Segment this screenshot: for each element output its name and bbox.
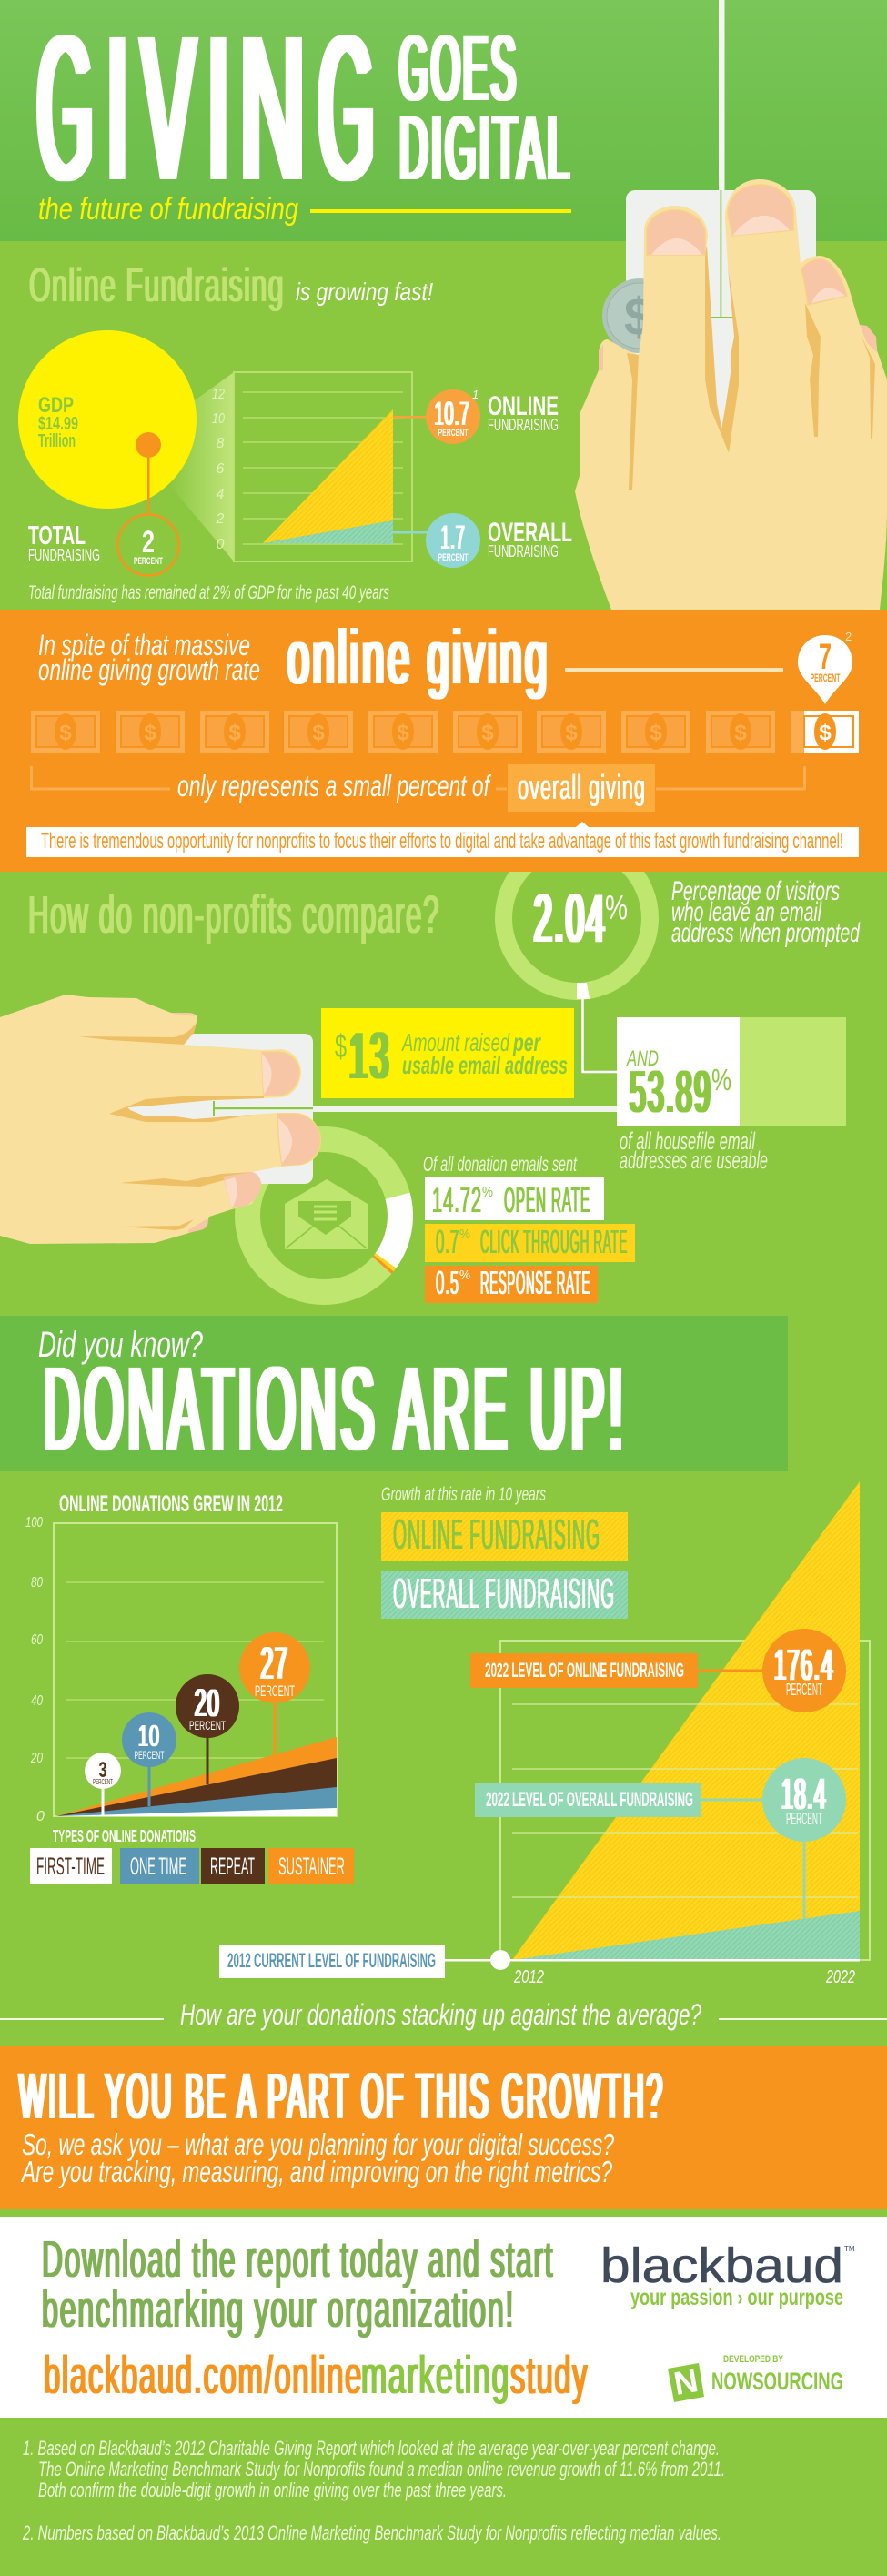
logo: blackbaud: blackbaud (600, 2238, 843, 2293)
GDP circle (18, 330, 197, 509)
callout: overall 1.7 percent: 1.7 (440, 519, 466, 556)
total fundraising callout (28, 432, 178, 575)
connector line (565, 668, 783, 672)
callout: 2022 overall level: 2022 LEVEL OF OVERALL FUNDRAISING (486, 1788, 693, 1811)
text: of all donation emails: Of all donation emails sent (423, 1152, 578, 1176)
callout: overall 1.7 percent: FUNDRAISING (488, 542, 559, 561)
bar stat: 53.89 percent: 53.89 (630, 1058, 712, 1125)
bills row (31, 711, 859, 753)
title: I (208, 0, 228, 224)
logo: blackbaud: TM (844, 2245, 855, 2253)
callout: 2022 online level: 2022 LEVEL OF ONLINE FUNDRAISING (485, 1659, 684, 1682)
line chart: fundraising growth (212, 372, 412, 561)
total fundraising callout: FUNDRAISING (28, 546, 100, 564)
questions: Are you tracking, measuring, and improving on the right metrics? (21, 2155, 612, 2188)
footnotes: Both confirm the double-digit growth in online giving over the past three years. (38, 2479, 507, 2501)
callout: 2022 online level: PERCENT (786, 1681, 822, 1699)
lead text: online giving growth rate (38, 653, 260, 686)
stat: open rate: 14.72 (432, 1181, 482, 1220)
legend: types of online donations (30, 1827, 354, 1884)
callout: $13 per email: usable email address (402, 1051, 568, 1079)
panel: orange online giving (0, 610, 887, 872)
title: G (318, 0, 374, 224)
heading: online fundraising: Online Fundraising (29, 259, 285, 312)
lead text (38, 629, 260, 686)
icon: envelope (285, 1179, 368, 1249)
pin: 27 percent (239, 1632, 310, 1756)
area chart: online donations: 40 (31, 1693, 43, 1709)
ring stat: 2.04 percent (504, 844, 650, 999)
stat: open rate (425, 1177, 604, 1220)
callout: online 10.7 percent: ONLINE (488, 391, 559, 421)
logo: nowsourcing: N (671, 2361, 701, 2402)
url: study (510, 2346, 589, 2405)
pin: 3 percent (85, 1753, 121, 1816)
heading: online giving: online giving (287, 614, 550, 700)
line chart: fundraising growth: 6 (217, 461, 225, 477)
callout: 2022 overall level: 18.4 (781, 1771, 827, 1819)
panel: download report (0, 2217, 887, 2418)
GDP circle: $14.99 (38, 414, 78, 434)
bar stat: 53.89 percent (617, 1017, 846, 1126)
pin: 7 percent: 7 (819, 637, 832, 677)
pin: 20 percent (176, 1674, 239, 1784)
url: blackbaud.com/online (44, 2346, 363, 2405)
stat: click through rate (425, 1223, 635, 1262)
line chart: fundraising growth: 12 (212, 387, 225, 402)
mouse cable (719, 0, 724, 191)
callout: $13 per email: per (512, 1028, 541, 1056)
icon: hand on mouse (575, 179, 887, 610)
pin: 27 percent: PERCENT (255, 1682, 295, 1700)
text: OPEN RATE (504, 1181, 590, 1220)
text: DIGITAL (399, 97, 572, 199)
title (37, 0, 572, 224)
logo: nowsourcing: DEVELOPED BY (723, 2354, 784, 2365)
line chart: fundraising growth: 10 (212, 411, 225, 427)
ring chart: email rates (247, 1139, 400, 1292)
callout: 2022 overall level (475, 1758, 846, 1919)
title: G (37, 0, 93, 224)
legend: overall fundraising (381, 1570, 628, 1619)
pin: 10 percent: 10 (138, 1719, 160, 1753)
callout: $13 per email: Amount raised (401, 1028, 510, 1056)
bills row: $ (144, 721, 156, 745)
box: overall giving (508, 764, 655, 812)
total fundraising callout: PERCENT (134, 556, 163, 567)
pin: 20 percent: PERCENT (189, 1718, 226, 1732)
bills row: $ (481, 721, 494, 745)
pin: 3 percent: PERCENT (93, 1778, 113, 1786)
ring stat: 2.04 percent: % (605, 889, 628, 927)
callout: overall 1.7 percent: PERCENT (438, 552, 469, 563)
lead text: In spite of that massive (38, 629, 250, 662)
callout: overall 1.7 percent (393, 513, 572, 568)
box: overall giving: overall giving (518, 769, 646, 807)
chart title: ONLINE DONATIONS GREW IN 2012 (59, 1491, 283, 1517)
bar stat: 53.89 percent: AND (626, 1046, 659, 1071)
title: V (142, 0, 195, 224)
callout: $13 per email: $ (335, 1027, 347, 1065)
pin: 3 percent: 3 (98, 1758, 107, 1783)
chart: ten year projection (445, 1481, 870, 1987)
subtitle rule (310, 209, 571, 213)
text: ONLINE FUNDRAISING (393, 1510, 600, 1558)
stat: click through rate: 0.7 (436, 1223, 459, 1260)
text: small percent: only represents a small percent of (177, 769, 492, 803)
footnote: total fundraising: Total fundraising has remained at 2% of GDP for the past 40 years (28, 582, 389, 603)
panel: donations are up band (0, 1316, 788, 1475)
pin: 7 percent: PERCENT (810, 672, 841, 684)
total fundraising callout: 2 (142, 525, 155, 560)
legend: types of online donations: ONE TIME (130, 1853, 186, 1880)
line chart: fundraising growth: 2 (216, 511, 225, 527)
bar stat: 53.89 percent: % (711, 1063, 731, 1096)
bills row: $ (565, 721, 578, 745)
callout: online 10.7 percent: FUNDRAISING (488, 416, 559, 434)
cta text: benchmarking your organization! (42, 2280, 515, 2339)
title: I (107, 0, 127, 224)
callout: 2012 current level (219, 1945, 510, 1978)
pin: 7 percent: 2 (845, 630, 852, 643)
text: did you know: Did you know? (38, 1325, 204, 1365)
stat: response rate (425, 1264, 598, 1303)
area chart: online donations: 0 (36, 1809, 45, 1824)
chart: ten year projection: 2012 (513, 1967, 544, 1987)
bills row: $ (397, 721, 409, 745)
callout: online 10.7 percent (393, 388, 559, 444)
area chart: online donations: 60 (31, 1632, 43, 1648)
logo: nowsourcing (668, 2354, 843, 2402)
legend: online fundraising (381, 1510, 628, 1561)
text: percentage of visitors (671, 876, 861, 948)
questions (21, 2127, 614, 2188)
heading: how do non-profits compare: How do non-profits compare? (28, 885, 440, 945)
pin: 20 percent: 20 (195, 1682, 220, 1725)
pin: 10 percent: PERCENT (135, 1749, 165, 1762)
connector (582, 999, 617, 1072)
bills row: $ (734, 721, 747, 745)
legend: types of online donations: SUSTAINER (278, 1853, 345, 1880)
icon: side hand (0, 995, 321, 1244)
GDP circle: Trillion (38, 431, 76, 451)
legend: types of online donations: TYPES OF ONLINE DONATIONS (53, 1827, 196, 1845)
url: marketing (361, 2346, 510, 2405)
ring stat: 2.04 percent: 2.04 (534, 880, 607, 956)
icon: coin: $ (624, 288, 653, 347)
callout: $13 per email: 13 (349, 1020, 391, 1093)
icon: mouse side (109, 1034, 313, 1184)
banner: opportunity (26, 822, 859, 857)
bills row: $ (312, 721, 325, 745)
area chart: online donations: 80 (31, 1575, 43, 1591)
line chart: fundraising growth: 0 (217, 537, 225, 552)
GDP circle: GDP (38, 393, 74, 418)
bills row: $ (59, 721, 72, 745)
pin: 10 percent (122, 1712, 176, 1806)
text: housefile: addresses are useable (620, 1147, 768, 1174)
zoom beam (170, 372, 234, 561)
area chart: online donations: 100 (25, 1515, 43, 1530)
icon: mouse top (626, 190, 816, 440)
text: housefile: of all housefile email (620, 1127, 756, 1155)
callout: 2022 overall level: PERCENT (786, 1810, 822, 1828)
legend: types of online donations: REPEAT (210, 1853, 255, 1880)
area chart: online donations: 20 (30, 1751, 43, 1766)
title: N (240, 0, 305, 224)
heading tail: is growing fast! (296, 278, 433, 306)
callout: overall 1.7 percent: OVERALL (488, 518, 572, 548)
stat: response rate: % (459, 1268, 470, 1283)
mouse cable horizontal (313, 1106, 617, 1112)
bills row: $ (819, 721, 832, 745)
text: housefile (620, 1127, 768, 1174)
callout: online 10.7 percent: 10.7 (435, 395, 469, 432)
callout: online 10.7 percent: PERCENT (438, 428, 469, 439)
area chart: online donations (25, 1515, 337, 1824)
callout: online 10.7 percent: 1 (472, 388, 479, 401)
stat: response rate: 0.5 (436, 1264, 459, 1301)
header band (0, 0, 887, 241)
callout: 2012 current level: 2012 CURRENT LEVEL OF FUNDRAISING (227, 1949, 436, 1972)
pin: 27 percent: 27 (260, 1638, 289, 1689)
text: growth at this rate: Growth at this rate in 10 years (381, 1484, 546, 1505)
text: CLICK THROUGH RATE (480, 1223, 628, 1260)
chart: ten year projection: 2022 (825, 1967, 855, 1987)
cta text (42, 2230, 554, 2339)
stat: open rate: % (482, 1185, 493, 1200)
line chart: fundraising growth: 4 (217, 487, 225, 502)
icon: coin (602, 278, 677, 353)
text: RESPONSE RATE (480, 1264, 590, 1301)
legend: types of online donations: FIRST-TIME (36, 1853, 105, 1880)
footnotes (22, 2437, 725, 2544)
stat: click through rate: % (459, 1227, 470, 1242)
line chart: fundraising growth: 8 (217, 436, 225, 451)
panel: will you be a part (0, 2046, 887, 2209)
bracket (31, 766, 804, 789)
title: GOES (399, 16, 519, 120)
bills row: $ (650, 721, 662, 745)
callout: 2022 online level (470, 1629, 846, 1712)
logo: blackbaud (600, 2238, 855, 2310)
questions: So, we ask you – what are you planning for your digital success? (22, 2127, 614, 2161)
subtitle: the future of fundraising (38, 192, 298, 227)
pin: 7 percent (798, 630, 852, 704)
callout: $13 per email (321, 1008, 574, 1098)
total fundraising callout: TOTAL (28, 521, 86, 551)
bills row: $ (228, 721, 241, 745)
